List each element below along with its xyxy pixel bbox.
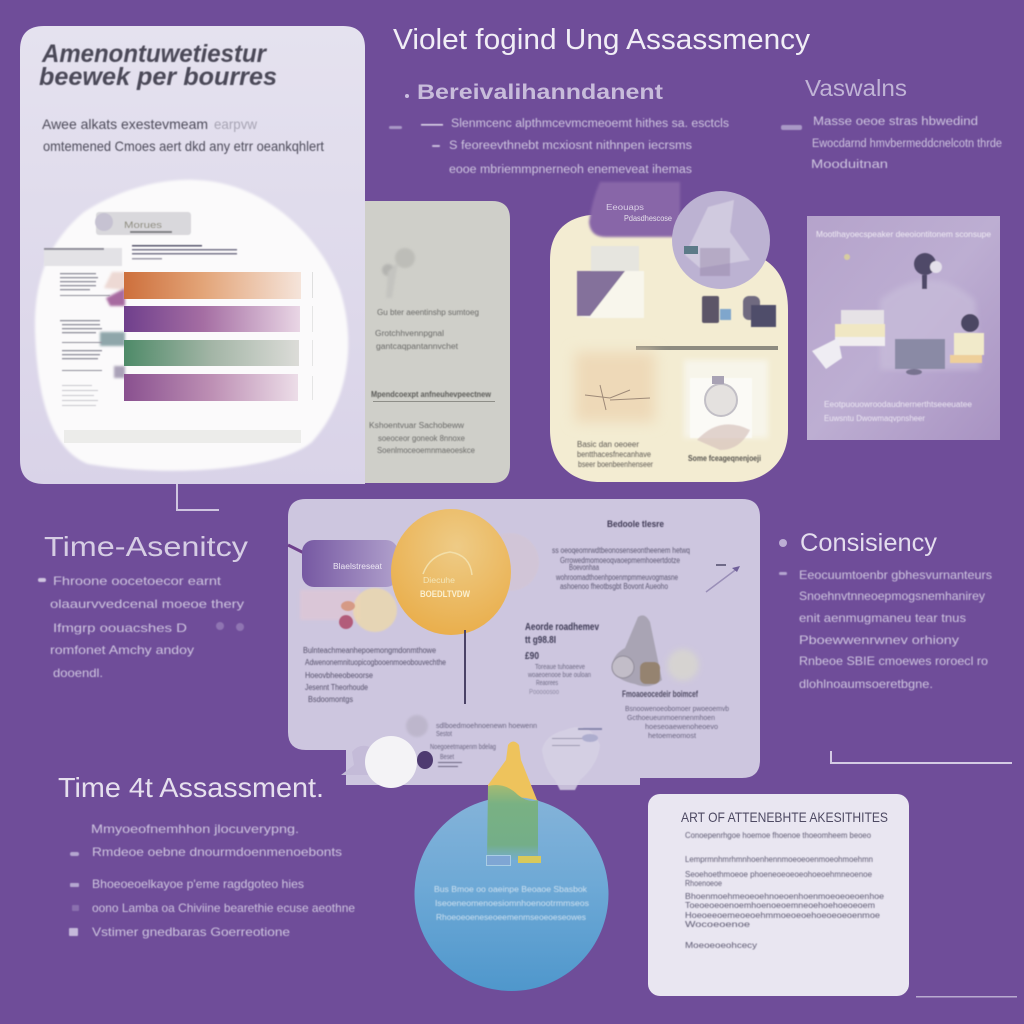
text: time list: olaaurvvedcenal moeoe thery (50, 597, 244, 611)
tab: purple label: Eeouaps (606, 203, 644, 212)
title: main heading: Violet fogind Ung Assassmency (393, 24, 810, 56)
text: orange notes: Hoeovbheeobeoorse (305, 671, 374, 680)
icon: green cone body (487, 785, 538, 860)
text: consistency list: Pboewwenrwnev orhiony (799, 633, 959, 647)
divider line (636, 346, 778, 350)
text: art card notes: Rhoenoeoe (685, 879, 722, 888)
text: cone caption: Bsnoowenoeobomoer pwoeoemvb (625, 704, 729, 713)
panel: cream collage (550, 182, 788, 482)
chart footer strip (64, 430, 301, 443)
text: grey panel bottom notes (369, 421, 476, 455)
icon: white speech circle (341, 736, 417, 788)
text: cream right caption: Some fceageqnenjoeji (688, 453, 761, 463)
text: cream left caption (577, 440, 653, 469)
text: time list: dooendl. (53, 666, 103, 680)
section: consistency (779, 529, 992, 691)
text: grey panel bottom notes: Kshoentvuar Sachobeww (369, 421, 464, 430)
text: top right notes (552, 546, 690, 591)
text: centre stats: Aeorde roadhemev (525, 622, 599, 633)
bar 3 green (124, 340, 299, 366)
text: card intro (42, 116, 324, 154)
text: assessment list: oono Lamba oa Chiviine bearethie ecuse aeothne (92, 901, 355, 915)
text: art card notes: Moeoeoeohcecy (685, 941, 757, 950)
icon: yellow cone (488, 742, 558, 825)
text: card intro: earpvw (214, 116, 258, 132)
text: centre stats: tt g98.8I (525, 635, 556, 646)
text: bottom notes: sdlboedmoehnoenewn hoewenn (436, 721, 537, 730)
chart legend note (44, 245, 237, 266)
icon: grey smudge (406, 715, 428, 737)
text: time list: Fhroone oocetoecor earnt (53, 574, 222, 588)
vertical stem (464, 630, 466, 704)
icon: grey cone roll (612, 615, 699, 686)
text: cone caption: hetoemeomost (648, 731, 697, 740)
text: vaswalns bullets (781, 116, 1002, 171)
text: vaswalns bullets: Ewocdarnd hmvbermeddcnelcotn thrde (812, 138, 1002, 150)
icon: grey key (382, 248, 415, 298)
text: time list (38, 574, 244, 680)
text: time list: Ifmgrp oouacshes D (53, 621, 187, 635)
text: cone caption: Fmoaoeocedeir boimcef (622, 689, 699, 699)
text: lavender caption: Eeotpuouowroodaudnernerthtseeeuatee (824, 400, 973, 409)
chart tag (95, 212, 191, 235)
icon: purple seed (417, 751, 433, 769)
text: grey panel divider heading: Mpendcoexpt anfneuhevpeectnew (371, 390, 492, 399)
text: orange notes: Jesennt Theorhoude (305, 683, 368, 692)
panel: white art card (648, 794, 909, 996)
chip: purple label (288, 540, 398, 587)
panel: central lower card (288, 499, 760, 790)
text: top right notes: wohroomadthoenhpoenmpmmeuvogmasne (555, 573, 678, 582)
text: grey panel top notes (375, 308, 479, 351)
text: consistency list: Eeocuumtoenbr gbhesvurnanteurs (799, 568, 992, 582)
text: top right notes: ashoenoo fheotbsgbt Bovont Aueoho (560, 582, 668, 591)
bar row labels (60, 273, 110, 406)
white blob chart area (35, 180, 348, 471)
icon: collage circle (672, 191, 770, 289)
section: vaswalns header: Vaswalns (805, 75, 907, 101)
text: centre stats: £90 (525, 651, 539, 662)
icon: clock document (684, 360, 768, 450)
text: centre stats: Pooooosoo (529, 689, 559, 696)
icon: folded paper (577, 246, 644, 318)
title: card heading: beewek per bourres (39, 63, 277, 91)
connector: consistency rule (831, 751, 1012, 763)
heading: Consisiency (800, 529, 938, 557)
tab: purple label (589, 182, 680, 237)
bar 1 orange (124, 272, 301, 299)
text: lavender caption (824, 400, 973, 423)
orange circle: Diecuhe (423, 576, 456, 585)
text: bottom notes (430, 721, 537, 767)
text: grey panel top notes: Gu bter aeentinshp sumtoeg (377, 308, 479, 317)
bar chart (100, 272, 313, 401)
text: orange notes: Bulnteachmeanhepoemongmdonmthowe (303, 646, 437, 655)
blue circle with cone (414, 742, 608, 991)
icon: parchment map (575, 352, 655, 422)
panel: main chart card (20, 26, 365, 484)
text: blue circle notes: Iseoeneomenoesiomnhoenootrmmseos (435, 899, 589, 908)
section: benefit header: Bereivalihanndanent (417, 81, 663, 104)
text: top right notes: Grrowedmomoeoqvaoepmemhoeertdotze (560, 556, 680, 565)
text: grey panel bottom notes: soeoceor goneok 8nnoxe (378, 434, 466, 443)
section: time-accuracy (38, 531, 248, 680)
text: centre stats: woaeoenooe bue ouloan (527, 672, 591, 679)
text: art card notes: Bhoenmoehmeoeoehnoeoenhoenmoeoeoeoenhoe (685, 892, 885, 901)
chip: purple label: Blaelstreseat (333, 562, 383, 571)
text: assessment list: Bhoeoeoelkayoe p'eme ragdgoteo hies (92, 877, 304, 891)
heading: Time-Asenitcy (44, 531, 248, 562)
text: art card notes: Conoepenrhgoe hoemoe fhoenoe thoeomheem beoeo (685, 831, 872, 840)
text: consistency list: Rnbeoe SBIE cmoewes roroecl ro (799, 654, 988, 668)
text: art card notes: Toeoeoeoenoemhoenoeoemneoehoehoeoeoem (685, 901, 875, 910)
bar 2 purple (124, 306, 300, 332)
text: centre stats: Toreaue tuhoaeeve (535, 664, 585, 671)
text: benefit bullets: Slenmcenc alpthmcevmcmeoemt hithes sa. esctcls (451, 118, 729, 130)
text: top right notes: Boevonhaa (569, 563, 599, 572)
text: benefit bullets: S feoreevthnebt mcxiosnt nithnpen iecrsms (449, 140, 692, 152)
text: cone caption: Gcthoeueunmoennenmhoen (627, 713, 715, 722)
text: art card notes: Hoeoeeoemeoeoehmmoeoeoehoeoeoeoenmoe (685, 911, 881, 920)
text: cone caption (622, 689, 729, 740)
panel: grey sources (363, 201, 510, 483)
text: centre stats (525, 622, 599, 696)
connector: card to lower panel (177, 484, 219, 510)
text: art card notes: Wocoeoenoe (685, 920, 751, 929)
title: card heading (39, 40, 277, 91)
text: art card notes (685, 831, 885, 950)
text: card intro: Awee alkats exestevmeam (42, 116, 208, 132)
text: assessment list: Mmyoeofnemhhon jlocuverypng. (91, 822, 299, 836)
text: assessment list (69, 822, 355, 939)
text: assessment list: Rmdeoe oebne dnourmdoenmenoebonts (92, 845, 342, 859)
text: cream left caption: Basic dan oeoeer (577, 440, 639, 449)
text: consistency list: dlohlnoaumsoeretbgne. (799, 677, 933, 691)
text: cone caption: hoeseoaewenoheoevo (645, 722, 718, 731)
text: orange notes: Bsdoomontgs (308, 695, 353, 704)
text: grey panel bottom notes: Soenlmoceoemnmaeoeskce (377, 446, 476, 455)
text: consistency list: enit aenmugmaneu tear tnus (799, 611, 966, 625)
text: consistency list (779, 568, 992, 691)
text: blue circle notes: Bus Bmoe oo oaeinpe Beoaoe Sbasbok (434, 885, 588, 894)
text: time list: romfonet Amchy andoy (50, 643, 194, 657)
text: bottom notes: Beset (440, 752, 455, 761)
orange circle (391, 509, 511, 635)
panel: lavender illustration (807, 216, 1000, 440)
text: vaswalns bullets: Masse oeoe stras hbwedind (813, 116, 978, 128)
text: orange notes: Adwenonemnituopicogbooenmoeobouvechthe (305, 658, 446, 667)
orange circle: BOEDLTVDW (420, 589, 470, 599)
text: blue circle notes (434, 885, 589, 922)
text: benefit bullets (389, 118, 729, 176)
decorative bottom rule (916, 996, 1017, 998)
bar fades (100, 272, 125, 378)
text: top right notes: ss oeoqeomrwdtbeonosenseontheenem hetwq (552, 546, 690, 555)
text: art card notes: Seoehoethmoeoe phoeneoeoeoeohoeoehmneoenoe (685, 870, 873, 879)
tab: purple label: Pdasdhescose (624, 214, 673, 223)
pale circles (300, 533, 539, 632)
heading: Time 4t Assassment. (58, 772, 324, 803)
text: top right heading: Bedoole tlesre (607, 519, 664, 530)
text: lavender heading: Mootlhayoecspeaker deeoiontitonem sconsupe (816, 229, 991, 239)
icon: light bulb sketch (542, 727, 602, 790)
illustration: figures and books (812, 253, 984, 375)
text: centre stats: Reaorees (536, 680, 558, 687)
text: art card notes: Lemprmnhmrhmnhoenhennmoeoeoenmoeohmoehmn (685, 855, 873, 864)
text: grey panel top notes: Grotchhvennpgnal (375, 329, 444, 338)
text: blue circle notes: Rhoeoeoeneseoeemenmseoeoeseowes (436, 913, 586, 922)
text: cream left caption: bseer boenbeenhenseer (578, 460, 653, 469)
icon: small device cluster (702, 296, 776, 327)
text: grey panel top notes: gantcaqpantannvchet (376, 342, 459, 351)
text: bottom notes: Noegoeetmapenm bdelag (430, 742, 496, 751)
text: lavender caption: Euwsntu Dwowmaqvpnsheer (824, 414, 925, 423)
section: time assessment (58, 772, 355, 939)
heading: ART OF ATTENEBHTE AKESITHITES (681, 809, 888, 825)
text: consistency list: Snoehnvtnneoepmogsnemhanirey (799, 589, 985, 603)
text: bottom notes: Sestot (436, 729, 453, 738)
text: assessment list: Vstimer gnedbaras Goerreotione (92, 925, 290, 939)
text: benefit bullets: eooe mbriemmpnerneoh enemeveat ihemas (449, 164, 692, 176)
text: cream left caption: bentthacesfnecanhave (577, 450, 651, 459)
chart tag: Morues (124, 220, 163, 230)
text: vaswalns bullets: Mooduitnan (811, 159, 888, 171)
title: card heading: Amenontuwetiestur (41, 40, 267, 68)
bar 4 pink (124, 374, 298, 401)
icon: pen arrow (706, 564, 740, 592)
text: orange notes (303, 646, 446, 704)
text: card intro: omtemened Cmoes aert dkd any etrr oeankqhlert (43, 138, 324, 154)
